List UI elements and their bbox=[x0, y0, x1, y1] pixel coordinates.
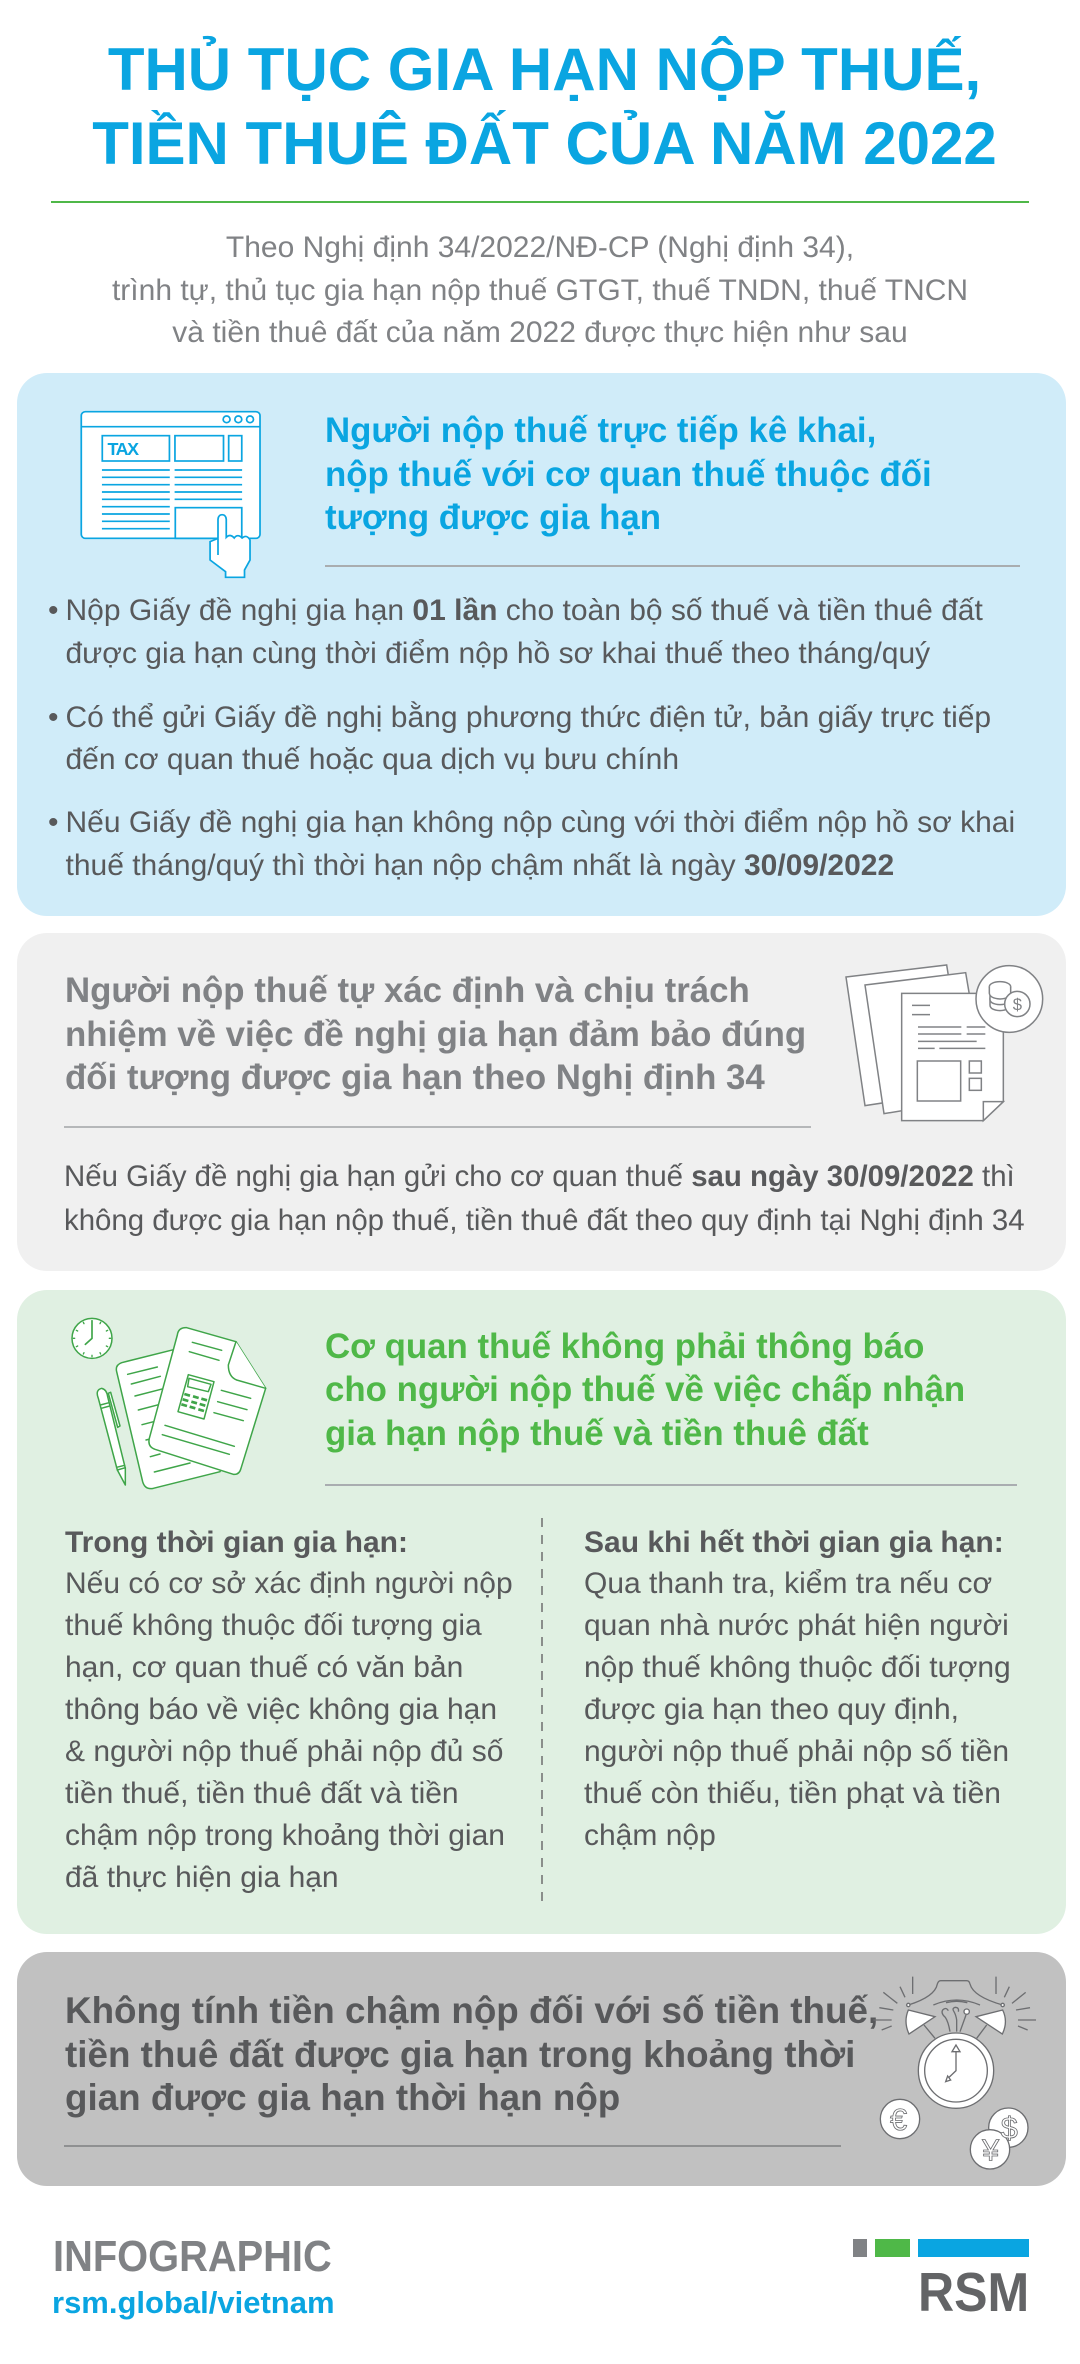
column: during extension: thông báo về việc không gia hạn bbox=[65, 1693, 497, 1726]
heading: tượng được gia hạn bbox=[325, 498, 661, 537]
column: after extension: quan nhà nước phát hiện người bbox=[584, 1609, 1009, 1642]
heading: nhiệm về việc đề nghị gia hạn đảm bảo đúng bbox=[65, 1014, 806, 1054]
intro text bbox=[112, 231, 968, 349]
icon: tax form with hand: TAX bbox=[107, 439, 139, 459]
column: during extension: tiền thuế, tiền thuê đất và tiền bbox=[65, 1777, 459, 1810]
intro text: và tiền thuê đất của năm 2022 được thực hiện như sau bbox=[172, 316, 908, 349]
note text bbox=[64, 1160, 1025, 1236]
heading: Người nộp thuế tự xác định và chịu trách bbox=[65, 971, 750, 1010]
column: during extension: đã thực hiện gia hạn bbox=[65, 1861, 339, 1894]
bullet 1 bbox=[48, 594, 983, 670]
icon: clock, pen and documents bbox=[71, 1318, 266, 1490]
column: during extension: Trong thời gian gia hạn: bbox=[65, 1526, 408, 1558]
column: after extension: chậm nộp bbox=[584, 1819, 716, 1852]
icon: alarm clock and coins: $ bbox=[1001, 2112, 1018, 2146]
bullet 1: • bbox=[48, 594, 59, 627]
column: during extension: chậm nộp trong khoảng thời gian bbox=[65, 1819, 505, 1852]
heading: cho người nộp thuế về việc chấp nhận bbox=[325, 1370, 965, 1409]
icon: alarm clock and coins bbox=[874, 1976, 1036, 2170]
icon: tax form with hand bbox=[80, 410, 261, 578]
logo: RSM bbox=[853, 2239, 1029, 2323]
note text: Nếu Giấy đề nghị gia hạn gửi cho cơ quan thuế sau ngày 30/09/2022 thì bbox=[64, 1160, 1015, 1193]
column: after extension: người nộp thuế phải nộp số tiền bbox=[584, 1735, 1009, 1768]
title: THỦ TỤC GIA HẠN NỘP THUẾ, bbox=[108, 36, 981, 103]
column: after extension: Sau khi hết thời gian gia hạn: bbox=[584, 1526, 1004, 1558]
column: during extension bbox=[65, 1526, 513, 1894]
bullet 3 bbox=[48, 806, 1015, 882]
icon: alarm clock and coins: € bbox=[890, 2103, 907, 2137]
column: after extension: Qua thanh tra, kiểm tra nếu cơ bbox=[584, 1567, 992, 1600]
panel: direct declaration bbox=[17, 373, 1066, 916]
icon: alarm clock and coins: ¥ bbox=[981, 2134, 1000, 2168]
logo: RSM: RSM bbox=[918, 2261, 1029, 2323]
note text: không được gia hạn nộp thuế, tiền thuê đất theo quy định tại Nghị định 34 bbox=[64, 1204, 1025, 1236]
panel: direct declaration: được gia hạn cùng thời điểm nộp hồ sơ khai thuế theo tháng/quý bbox=[66, 636, 930, 670]
footer: infographic label: INFOGRAPHIC bbox=[53, 2232, 332, 2280]
panel: direct declaration: Nộp Giấy đề nghị gia hạn 01 lần cho toàn bộ số thuế và tiền thuê đất bbox=[66, 594, 983, 627]
heading bbox=[325, 411, 932, 537]
bullet 3: • bbox=[48, 806, 59, 839]
heading: gia hạn nộp thuế và tiền thuê đất bbox=[325, 1414, 869, 1452]
footer: website: rsm.global/vietnam bbox=[52, 2285, 335, 2320]
title bbox=[92, 36, 997, 177]
icon: documents and coins bbox=[845, 964, 1044, 1122]
bullet 2: • bbox=[48, 700, 59, 734]
heading: tiền thuê đất được gia hạn trong khoảng thời bbox=[65, 2034, 855, 2074]
heading bbox=[65, 971, 806, 1097]
column: after extension: thuế còn thiếu, tiền phạt và tiền bbox=[584, 1777, 1001, 1810]
title: TIỀN THUÊ ĐẤT CỦA NĂM 2022 bbox=[92, 110, 997, 177]
column: during extension: hạn, cơ quan thuế có văn bản bbox=[65, 1651, 463, 1684]
heading bbox=[325, 1326, 965, 1452]
heading: đối tượng được gia hạn theo Nghị định 34 bbox=[65, 1058, 765, 1097]
heading: Người nộp thuế trực tiếp kê khai, bbox=[325, 411, 876, 450]
intro text: Theo Nghị định 34/2022/NĐ-CP (Nghị định 34), bbox=[226, 231, 854, 264]
heading: Không tính tiền chậm nộp đối với số tiền thuế, bbox=[65, 1990, 878, 2031]
icon: documents and coins: $ bbox=[1013, 995, 1022, 1014]
panel: direct declaration: thuế tháng/quý thì thời hạn nộp chậm nhất là ngày 30/09/2022 bbox=[66, 848, 894, 882]
bullet 2 bbox=[48, 700, 991, 776]
panel: direct declaration: đến cơ quan thuế hoặc qua dịch vụ bưu chính bbox=[66, 743, 679, 776]
panel: tax authority notice bbox=[17, 1290, 1066, 1934]
column: during extension: Nếu có cơ sở xác định người nộp bbox=[65, 1567, 513, 1600]
heading: nộp thuế với cơ quan thuế thuộc đối bbox=[325, 454, 932, 494]
heading bbox=[65, 1990, 878, 2118]
panel: direct declaration: Nếu Giấy đề nghị gia hạn không nộp cùng với thời điểm nộp hồ sơ khai bbox=[66, 806, 1015, 839]
heading: gian được gia hạn thời hạn nộp bbox=[65, 2077, 620, 2118]
column: during extension: & người nộp thuế phải nộp đủ số bbox=[65, 1735, 503, 1768]
heading: Cơ quan thuế không phải thông báo bbox=[325, 1326, 924, 1366]
column: after extension: nộp thuế không thuộc đối tượng bbox=[584, 1651, 1011, 1684]
panel: direct declaration: Có thể gửi Giấy đề nghị bằng phương thức điện tử, bản giấy trực tiếp bbox=[66, 700, 991, 734]
panel: no late payment bbox=[17, 1952, 1066, 2186]
column: during extension: thuế không thuộc đối tượng gia bbox=[65, 1609, 482, 1642]
intro text: trình tự, thủ tục gia hạn nộp thuế GTGT, thuế TNDN, thuế TNCN bbox=[112, 274, 968, 306]
panel: taxpayer responsibility bbox=[17, 933, 1066, 1271]
column: after extension: được gia hạn theo quy định, bbox=[584, 1693, 959, 1726]
column: after extension bbox=[584, 1526, 1011, 1852]
